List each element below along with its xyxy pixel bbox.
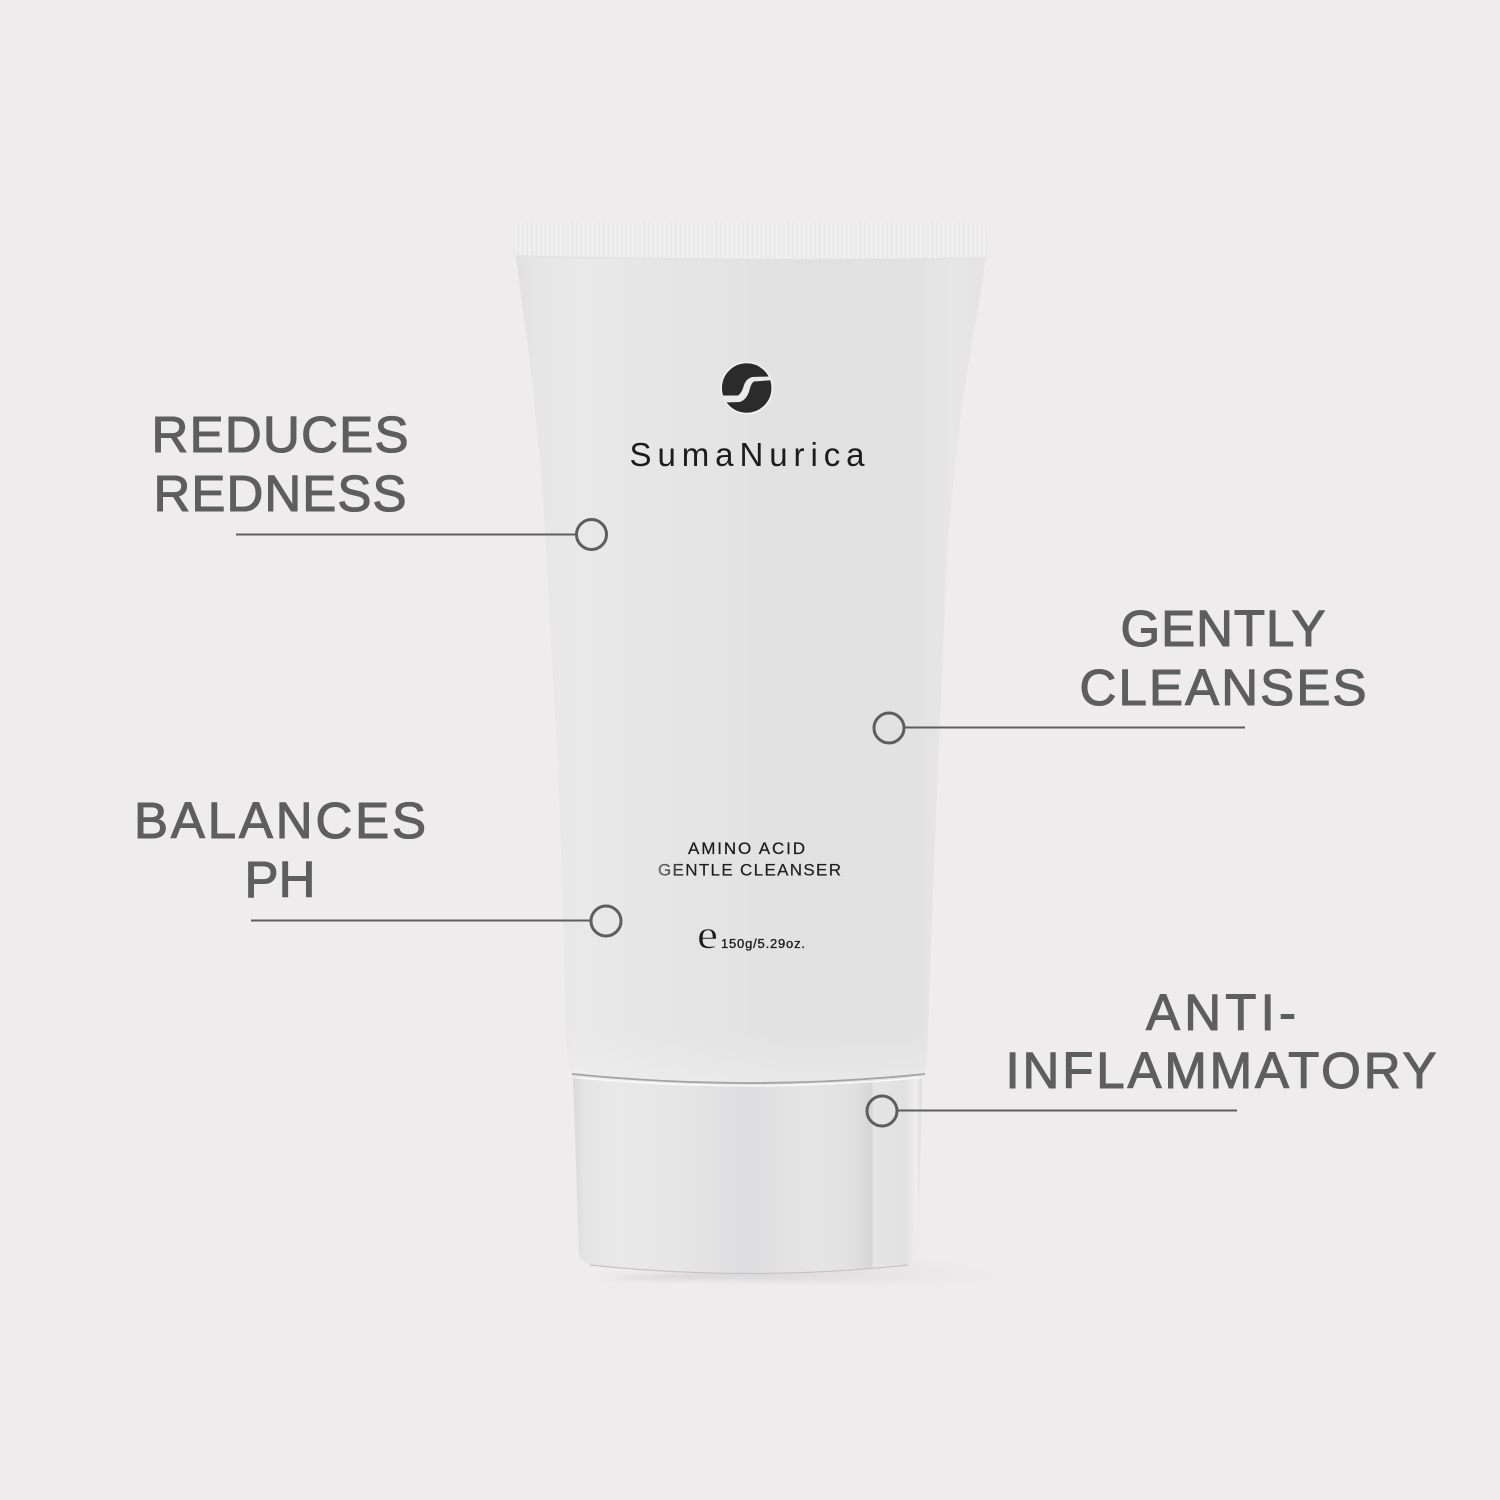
tube body <box>516 256 986 1084</box>
callout: balances ph: BALANCES <box>134 792 426 849</box>
net weight: 150g/5.29oz. <box>721 936 805 951</box>
logo mark <box>720 362 774 414</box>
brand name: SumaNurica <box>630 436 865 473</box>
callout: anti-inflammatory: ANTI- <box>1146 984 1296 1041</box>
callout: anti-inflammatory: INFLAMMATORY <box>1006 1042 1436 1099</box>
net weight <box>697 912 805 957</box>
callout: reduces redness <box>152 406 606 550</box>
callout: anti-inflammatory <box>867 984 1436 1126</box>
crimped tube end <box>514 222 988 260</box>
callout: balances ph: PH <box>244 851 316 908</box>
callout: gently cleanses: CLEANSES <box>1080 659 1366 716</box>
callout: reduces redness: REDUCES <box>152 406 408 463</box>
callout: gently cleanses: GENTLY <box>1120 600 1326 657</box>
product name <box>658 839 841 880</box>
product name: AMINO ACID <box>688 839 805 858</box>
product: cleanser tube <box>514 222 1012 1284</box>
callout: gently cleanses <box>874 600 1366 743</box>
cap <box>572 1074 925 1274</box>
cap shadow <box>600 1260 1012 1284</box>
crimp edge <box>515 256 987 260</box>
callout: reduces redness: REDNESS <box>154 465 406 522</box>
net weight: e <box>697 912 718 957</box>
product name: GENTLE CLEANSER <box>658 860 841 880</box>
callout: balances ph <box>134 792 621 936</box>
